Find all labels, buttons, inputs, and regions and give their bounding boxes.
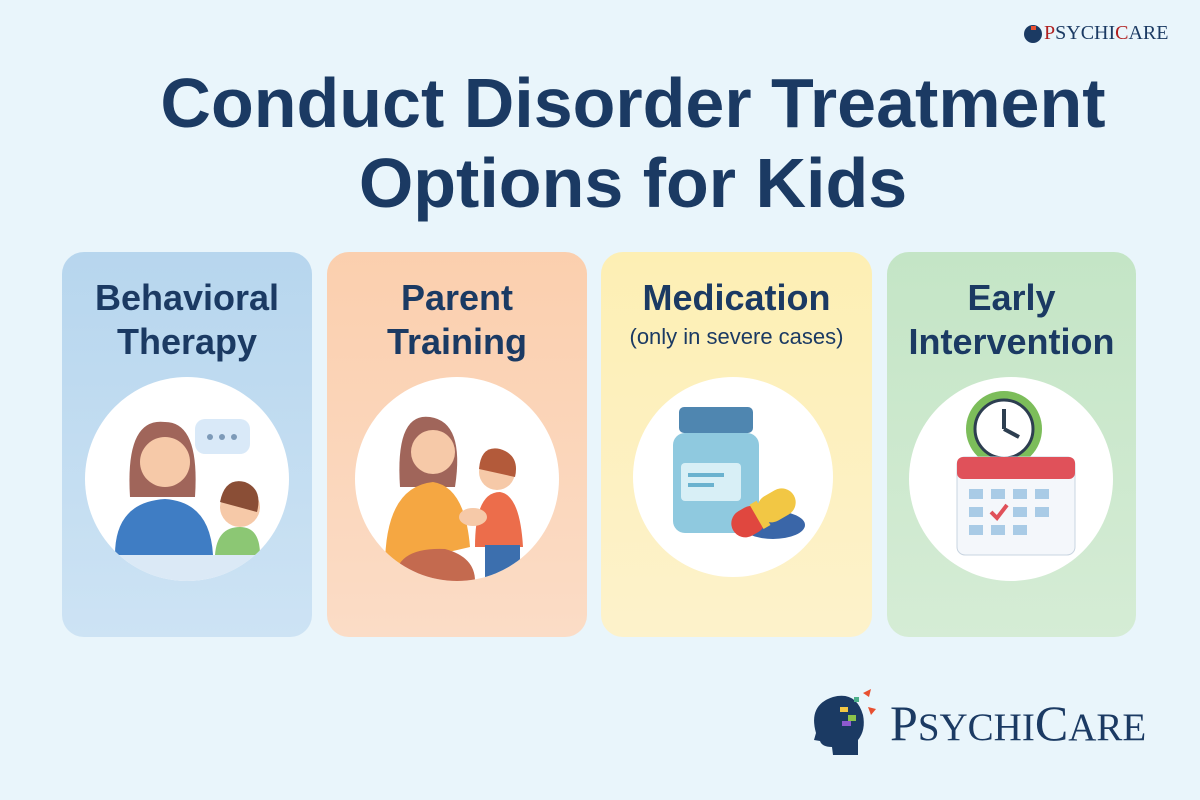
illustration: therapist and child	[85, 377, 289, 581]
card: medication: Medication	[642, 277, 830, 318]
card: medication: (only in severe cases)	[630, 324, 843, 349]
card: parent training	[327, 252, 587, 637]
card: early intervention	[887, 252, 1136, 637]
title: Conduct Disorder Treatment	[160, 64, 1106, 142]
small logo top right: PSYCHICARE	[1044, 22, 1168, 44]
illustration: pill bottle and capsule	[633, 377, 833, 577]
card: behavioral therapy	[62, 252, 312, 637]
card: early intervention: Early	[967, 277, 1056, 318]
illustration: parent and child holding hands	[355, 377, 559, 581]
card: behavioral therapy: Therapy	[117, 321, 257, 362]
card: parent training: Training	[387, 321, 527, 362]
title	[160, 64, 1106, 222]
logo bottom right	[814, 689, 1146, 755]
card: medication	[601, 252, 872, 637]
card: parent training: Parent	[401, 277, 513, 318]
logo text: PSYCHICARE	[890, 695, 1146, 751]
illustration: clock and calendar	[909, 377, 1113, 581]
icon: head	[814, 689, 876, 755]
card: behavioral therapy: Behavioral	[95, 277, 279, 318]
title: Options for Kids	[359, 144, 907, 222]
card: early intervention: Intervention	[908, 321, 1114, 362]
